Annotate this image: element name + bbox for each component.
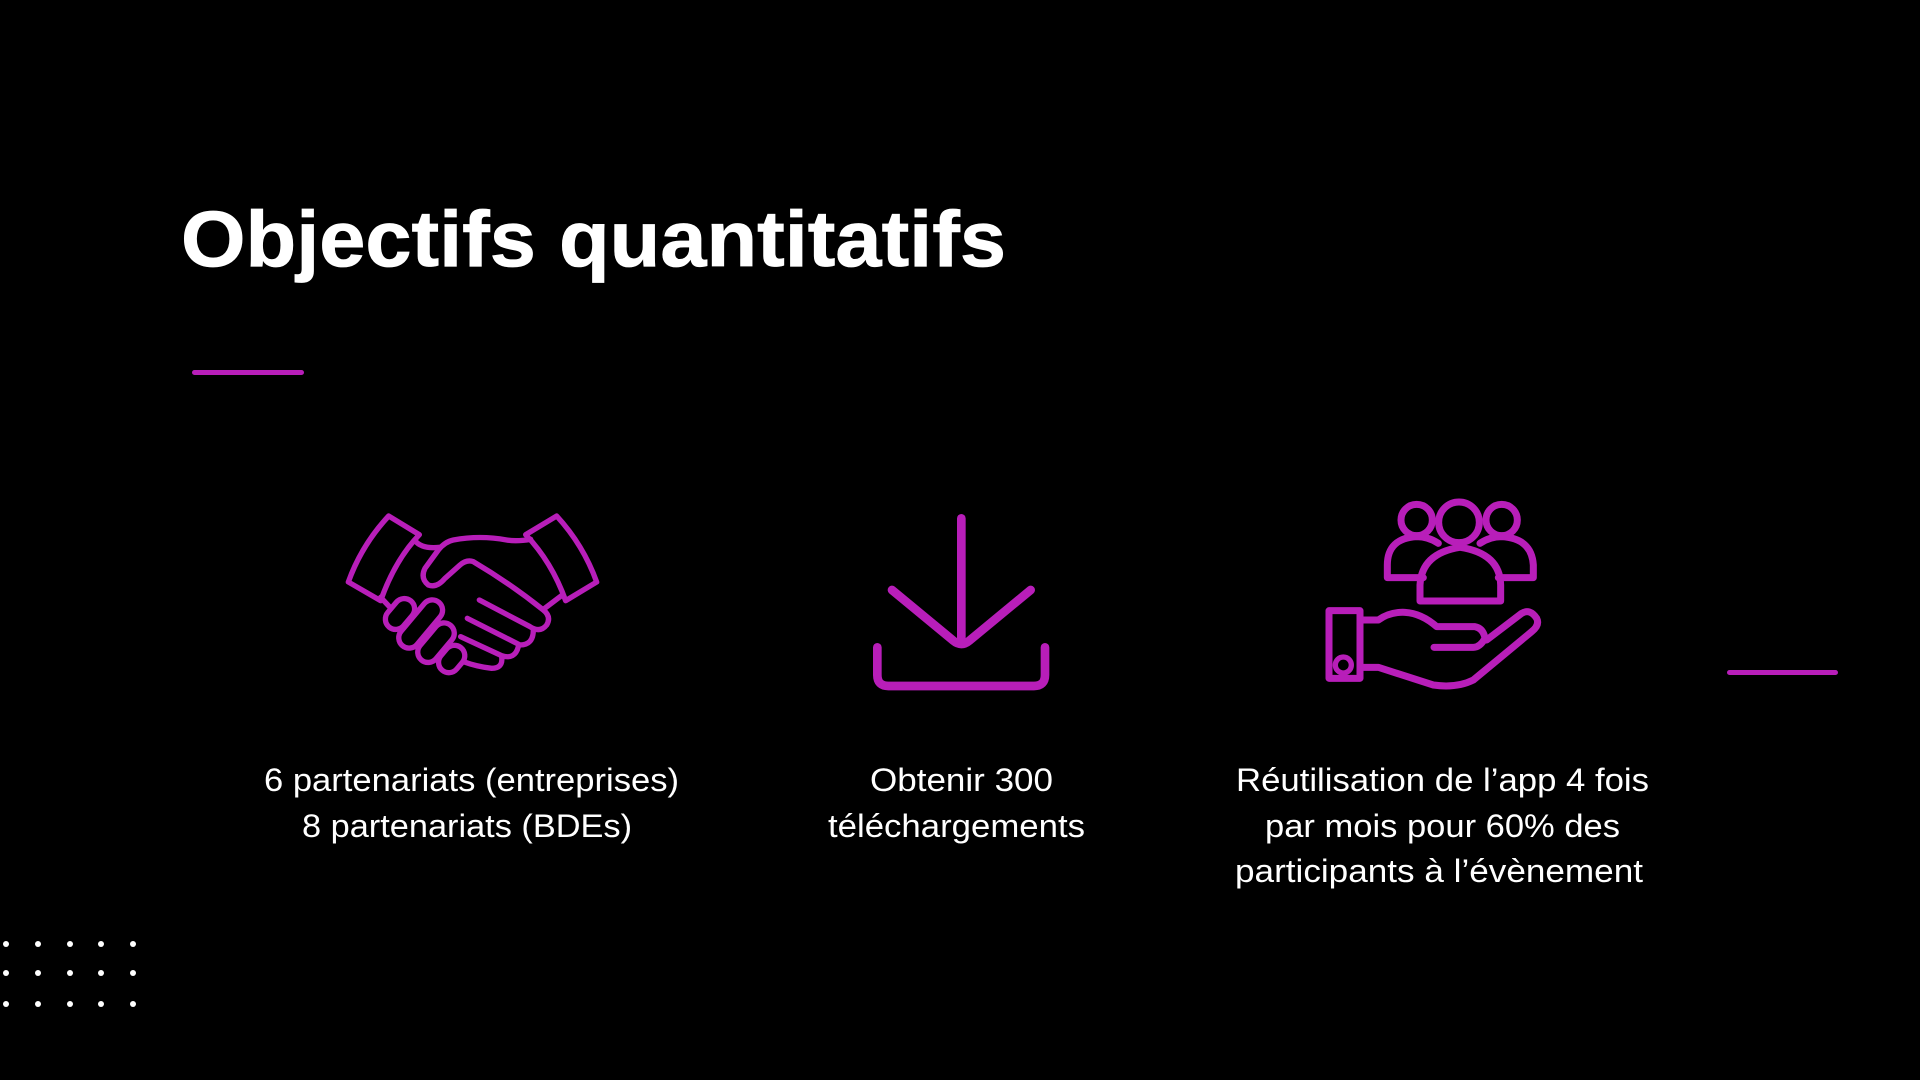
text: partnerships	[264, 762, 679, 844]
text: reuse: participants à l’évènement	[1235, 853, 1643, 889]
title accent line	[192, 370, 304, 375]
title: Objectifs quantitatifs	[181, 194, 1006, 283]
text: reuse: Réutilisation de l’app 4 fois	[1236, 762, 1649, 798]
icon: hand holding people	[1329, 502, 1538, 686]
icon: download	[877, 518, 1045, 686]
dot grid	[3, 941, 136, 1007]
text: partnerships: 6 partenariats (entreprises)	[264, 762, 679, 798]
text: downloads: téléchargements	[828, 808, 1085, 844]
text: partnerships: 8 partenariats (BDEs)	[302, 808, 632, 844]
text: downloads: Obtenir 300	[870, 762, 1053, 798]
text: reuse	[1235, 762, 1649, 889]
icon: handshake	[348, 516, 597, 677]
text: reuse: par mois pour 60% des	[1265, 808, 1620, 844]
right accent line	[1727, 670, 1838, 675]
text: downloads	[828, 762, 1085, 844]
